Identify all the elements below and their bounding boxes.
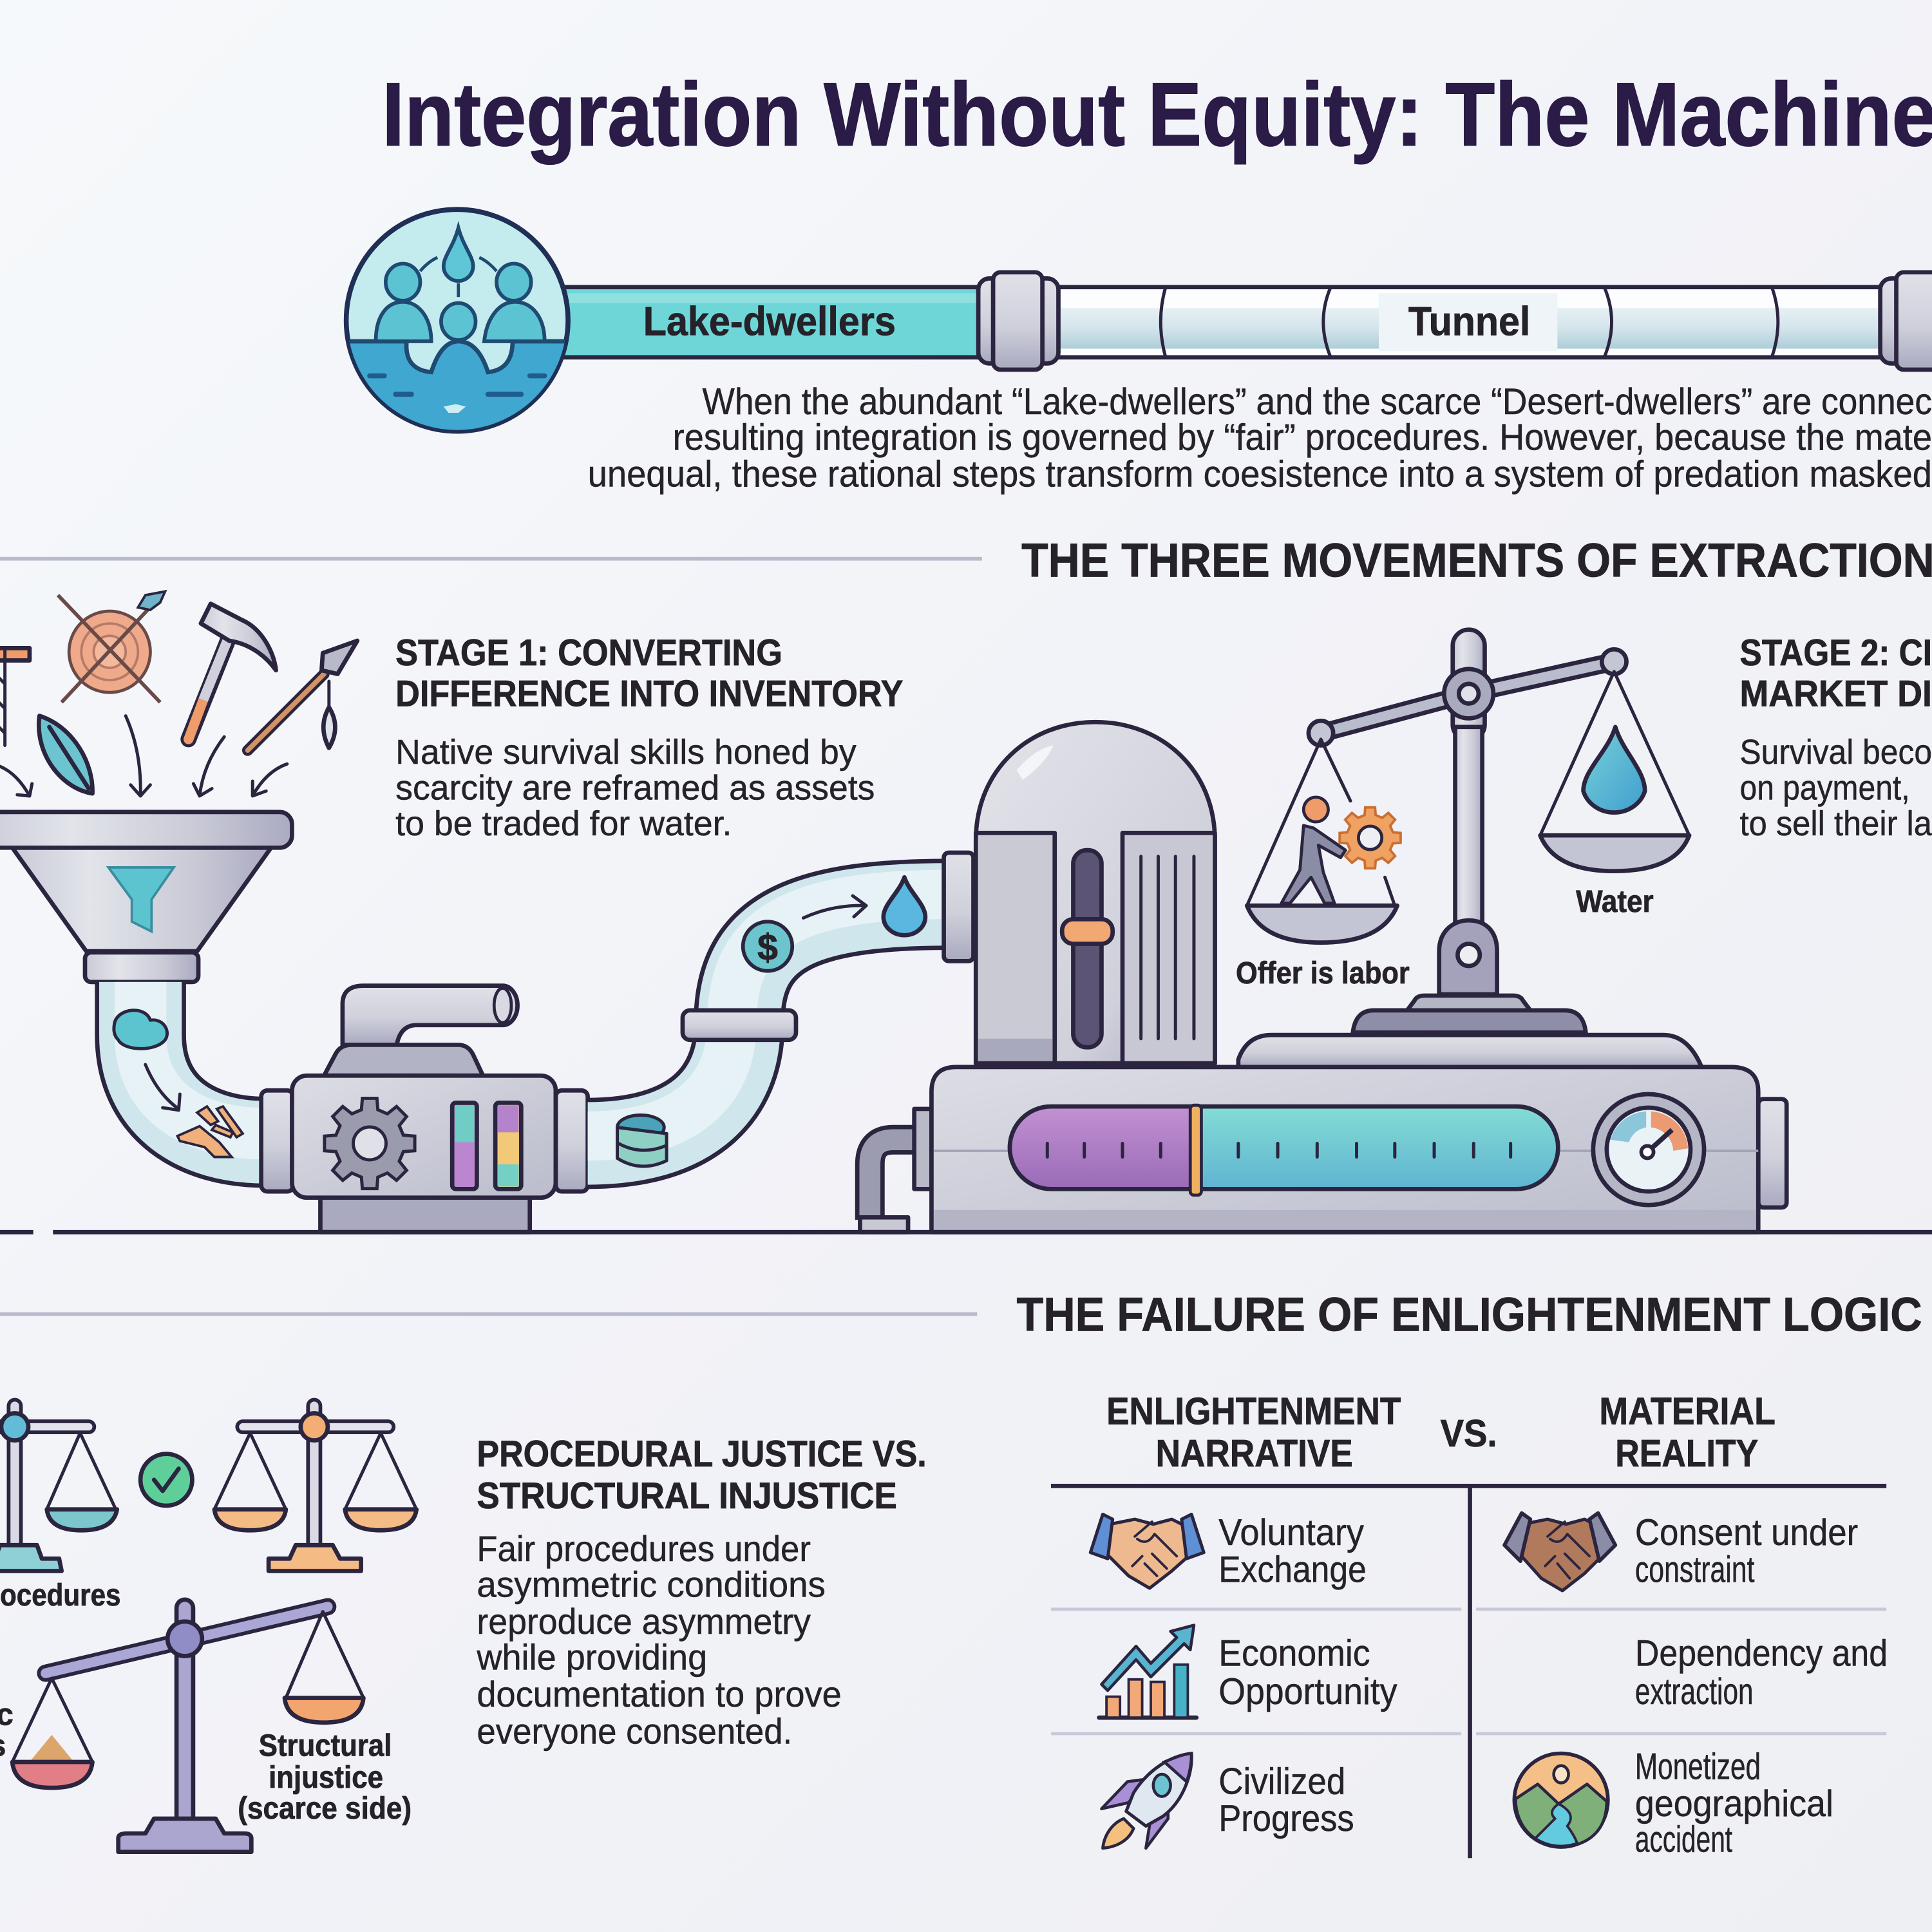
row: voluntary exchange bbox=[1090, 1512, 1367, 1591]
orange handle bbox=[1062, 919, 1113, 944]
row: monetized geographical accident: Monetized bbox=[1635, 1747, 1761, 1788]
icon: pump gear bbox=[325, 1098, 415, 1189]
panel: procedural justice text: everyone consented. bbox=[477, 1711, 792, 1751]
row: economic opportunity: Opportunity bbox=[1218, 1671, 1397, 1712]
pump bbox=[261, 986, 588, 1232]
pipe: pump to machine bbox=[588, 853, 973, 1166]
table headers: REALITY bbox=[1615, 1432, 1758, 1475]
icon: green check bbox=[140, 1454, 192, 1506]
row: economic opportunity: Economic bbox=[1218, 1633, 1370, 1674]
icon: target with crossed arrows bbox=[58, 591, 165, 703]
gauge bar bbox=[1010, 1105, 1558, 1195]
icons: native skills entering funnel bbox=[0, 591, 357, 796]
icon: chained handshake bbox=[1504, 1513, 1615, 1591]
control slot bbox=[1073, 850, 1101, 1047]
scale beam bbox=[1321, 661, 1614, 733]
scale post bbox=[1453, 630, 1484, 741]
icon: water drop bbox=[884, 877, 925, 935]
table headers: MATERIAL bbox=[1599, 1390, 1776, 1433]
panel: procedural justice text bbox=[476, 1434, 927, 1751]
balance scale: labor and water bbox=[1247, 630, 1689, 1032]
icon: landscape with river bbox=[1514, 1754, 1608, 1847]
icon: spear bbox=[248, 641, 357, 750]
intro paragraph bbox=[588, 381, 1932, 495]
scale: structural injustice bbox=[12, 1607, 363, 1852]
arrows into funnel bbox=[0, 716, 287, 796]
panel: procedural justice text: documentation to prove bbox=[477, 1674, 842, 1714]
icon: hammer bbox=[189, 604, 276, 739]
pump indicator bars bbox=[452, 1103, 521, 1189]
row: consent under constraint: constraint bbox=[1635, 1549, 1755, 1591]
scale: fair procedures right bbox=[214, 1406, 417, 1571]
icon: dollar coin bbox=[743, 922, 792, 971]
machine tower bbox=[976, 722, 1215, 1063]
table headers: VS. bbox=[1441, 1412, 1497, 1455]
scale labels: structural bbox=[0, 1698, 412, 1826]
lake-dwellers pipe bbox=[561, 287, 982, 357]
lake-dwellers pipe: Lake-dwellers bbox=[643, 299, 896, 344]
scale labels: structural: (scarce side) bbox=[238, 1792, 412, 1826]
right pan with water bbox=[1540, 672, 1689, 871]
row: civilized progress: Progress bbox=[1218, 1798, 1354, 1839]
panel: stage 1 text bbox=[395, 632, 903, 843]
funnel bbox=[0, 812, 292, 982]
scale labels: Offer is labor bbox=[1236, 956, 1410, 990]
panel: stage 1 text: STAGE 1: CONVERTING bbox=[395, 632, 782, 674]
comparison table bbox=[1051, 1390, 1888, 1861]
panel: stage 2 text bbox=[1740, 632, 1932, 843]
row: monetized geographical accident bbox=[1514, 1747, 1833, 1861]
icon: worker pushing gear bbox=[1282, 797, 1401, 903]
icon: dollar coin: $ bbox=[757, 927, 778, 968]
panel: procedural justice text: Fair procedures under bbox=[477, 1529, 811, 1569]
arrow in pipe bbox=[146, 1065, 180, 1110]
row: voluntary exchange: Voluntary bbox=[1218, 1512, 1364, 1553]
tunnel pipe: Tunnel bbox=[1408, 299, 1530, 344]
panel: procedural justice text: while providing bbox=[476, 1637, 707, 1677]
tunnel pipe bbox=[1055, 287, 1882, 357]
icon: handshake bbox=[1090, 1514, 1204, 1588]
scale labels bbox=[1236, 885, 1654, 990]
row: consent under constraint bbox=[1504, 1512, 1858, 1591]
row: civilized progress: Civilized bbox=[1218, 1761, 1345, 1803]
row: monetized geographical accident: geographical bbox=[1635, 1783, 1833, 1824]
row: consent under constraint: Consent under bbox=[1635, 1512, 1858, 1553]
coin stack bbox=[618, 1115, 667, 1166]
panel: procedural justice text: PROCEDURAL JUSTICE VS. bbox=[477, 1434, 927, 1475]
row: dependency and extraction: extraction bbox=[1635, 1671, 1754, 1712]
label: fair procedures: ocedures bbox=[0, 1578, 120, 1613]
row: voluntary exchange: Exchange bbox=[1218, 1549, 1367, 1591]
icon: lake-dwellers community bbox=[345, 209, 569, 433]
broken shards in pipe bbox=[178, 1106, 243, 1157]
panel: stage 1 text: scarcity are reframed as assets bbox=[395, 770, 875, 808]
scale labels: Water bbox=[1576, 885, 1654, 919]
pipe coupling right bbox=[1880, 272, 1932, 370]
icon: rising chart bbox=[1099, 1625, 1197, 1718]
blob in pipe bbox=[114, 1010, 167, 1048]
scale labels: structural: Structural bbox=[259, 1728, 392, 1763]
pipe: funnel to pump bbox=[114, 982, 265, 1157]
left pan with worker bbox=[1247, 739, 1401, 943]
panel: stage 2 text: on payment, bbox=[1740, 770, 1910, 808]
section heading: three movements bbox=[0, 533, 1932, 587]
row: civilized progress bbox=[1101, 1754, 1354, 1848]
row: monetized geographical accident: accident bbox=[1635, 1819, 1732, 1861]
pressure dial bbox=[1593, 1094, 1704, 1205]
panel: stage 1 text: Native survival skills honed by bbox=[395, 734, 857, 772]
row: dependency and extraction bbox=[1635, 1633, 1888, 1712]
arrow: money to water bbox=[803, 896, 866, 918]
icon: feather bbox=[39, 716, 93, 793]
machine base bbox=[860, 1035, 1786, 1232]
panel: procedural justice text: STRUCTURAL INJUSTICE bbox=[477, 1475, 897, 1517]
drain elbow bbox=[860, 1109, 931, 1232]
table headers: ENLIGHTENMENT bbox=[1106, 1390, 1401, 1433]
table headers bbox=[1106, 1390, 1776, 1475]
panel: procedural justice text: asymmetric conditions bbox=[477, 1565, 826, 1605]
ground line bbox=[0, 1231, 1932, 1233]
row: economic opportunity bbox=[1099, 1625, 1397, 1718]
icon: funnel badge bbox=[108, 867, 174, 931]
row: dependency and extraction: Dependency and bbox=[1635, 1633, 1888, 1674]
table headers: NARRATIVE bbox=[1156, 1432, 1353, 1475]
panel: lake to tunnel pipeline bbox=[345, 209, 1932, 433]
panel: stage 1 text: to be traded for water. bbox=[395, 805, 732, 843]
scale: fair procedures left bbox=[0, 1406, 117, 1571]
scale labels: structural: injustice bbox=[269, 1761, 383, 1795]
panel: procedural justice text: reproduce asymmetry bbox=[477, 1602, 811, 1642]
icon: ladder tool bbox=[0, 648, 30, 746]
icon: rocket bbox=[1101, 1754, 1191, 1848]
panel: stage 1 text: DIFFERENCE INTO INVENTORY bbox=[395, 673, 903, 714]
section heading: failure of enlightenment logic bbox=[0, 1287, 1922, 1341]
collar bbox=[683, 1010, 796, 1040]
pipe coupling left bbox=[978, 272, 1058, 370]
